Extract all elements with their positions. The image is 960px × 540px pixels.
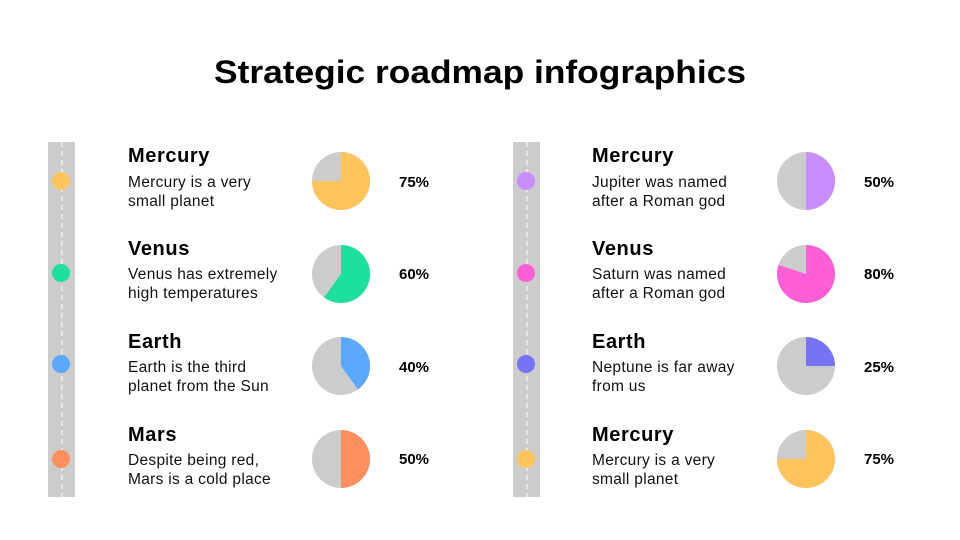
item: Mercury right bottom: small planet xyxy=(592,471,679,488)
pie 40% xyxy=(312,337,370,395)
item: Mercury right bottom: 75% xyxy=(864,451,894,468)
item: Mercury right: Mercury xyxy=(592,145,674,167)
item: Mercury right: Jupiter was named xyxy=(592,174,727,191)
item: Earth left: planet from the Sun xyxy=(128,378,269,395)
item: Mercury left: small planet xyxy=(128,193,215,210)
item: Mars left: Mars xyxy=(128,424,177,446)
item: Mercury right: 50% xyxy=(864,174,894,191)
pie 25% xyxy=(777,337,835,395)
item: Venus right xyxy=(592,238,894,303)
pie 60% xyxy=(312,245,370,303)
item: Mars left: Mars is a cold place xyxy=(128,471,271,488)
item: Mercury right xyxy=(592,145,894,210)
item: Earth right xyxy=(592,331,894,395)
item: Venus left: Venus has extremely xyxy=(128,266,278,283)
item: Mercury left xyxy=(128,145,429,210)
item: Venus right: Saturn was named xyxy=(592,266,726,283)
item: Mercury left: Mercury is a very xyxy=(128,174,251,191)
item: Earth right: from us xyxy=(592,378,646,395)
pie 75% yellow xyxy=(777,430,835,488)
item: Earth left: 40% xyxy=(399,359,429,376)
item: Mars left: Despite being red, xyxy=(128,452,259,469)
item: Earth left: Earth is the third xyxy=(128,359,246,376)
pie 75% xyxy=(312,152,370,210)
item: Mercury right: after a Roman god xyxy=(592,193,725,210)
item: Mercury right bottom xyxy=(592,424,894,488)
pie 50% xyxy=(312,430,370,488)
item: Earth right: 25% xyxy=(864,359,894,376)
pie 80% xyxy=(777,245,835,303)
item: Venus left xyxy=(128,238,429,303)
item: Mercury right bottom: Mercury is a very xyxy=(592,452,715,469)
item: Mars left xyxy=(128,424,429,488)
item: Earth left xyxy=(128,331,429,395)
item: Mercury right bottom: Mercury xyxy=(592,424,674,446)
pie 50% purple xyxy=(777,152,835,210)
road: right xyxy=(513,142,540,497)
item: Venus right: after a Roman god xyxy=(592,285,725,302)
item: Earth right: Earth xyxy=(592,331,646,353)
item: Earth right: Neptune is far away xyxy=(592,359,735,376)
item: Venus left: high temperatures xyxy=(128,285,258,302)
title: Strategic roadmap infographics xyxy=(214,54,746,90)
item: Mercury left: Mercury xyxy=(128,145,210,167)
item: Venus right: Venus xyxy=(592,238,654,260)
item: Venus left: Venus xyxy=(128,238,190,260)
item: Mercury left: 75% xyxy=(399,174,429,191)
item: Mars left: 50% xyxy=(399,451,429,468)
item: Venus right: 80% xyxy=(864,266,894,283)
item: Earth left: Earth xyxy=(128,331,182,353)
road: left xyxy=(48,142,75,497)
item: Venus left: 60% xyxy=(399,266,429,283)
